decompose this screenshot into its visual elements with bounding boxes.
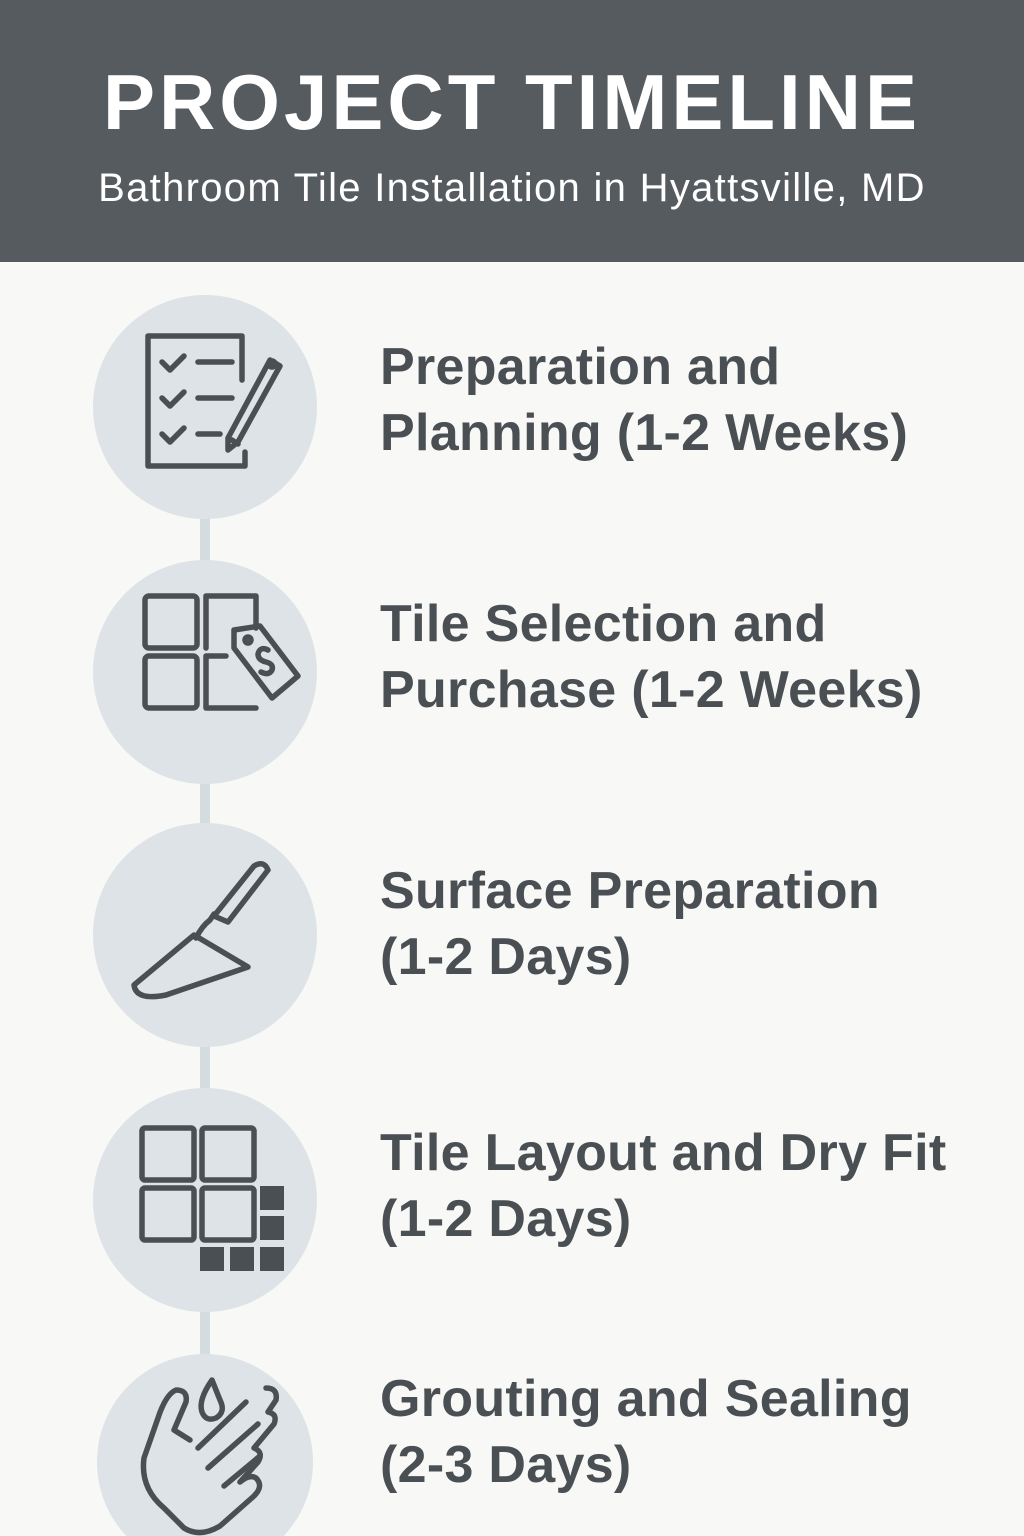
step 3 text: (1-2 Days) xyxy=(380,928,632,986)
icon: hand with drop xyxy=(97,1354,313,1536)
step 5 text xyxy=(380,1370,912,1494)
step 2 text: Purchase (1-2 Weeks) xyxy=(380,661,923,719)
step 5 text: (2-3 Days) xyxy=(380,1436,632,1494)
title: PROJECT TIMELINE xyxy=(103,58,921,146)
step 4 text: (1-2 Days) xyxy=(380,1190,632,1248)
step 2 text: Tile Selection and xyxy=(380,595,827,653)
icon: tiles with price tag xyxy=(93,560,317,784)
step 5 text: Grouting and Sealing xyxy=(380,1370,912,1428)
icon: checklist xyxy=(93,295,317,519)
step 3 text xyxy=(380,862,880,986)
step 1 text xyxy=(380,338,908,462)
icon: tile layout xyxy=(93,1088,317,1312)
subtitle: Bathroom Tile Installation in Hyattsville, MD xyxy=(98,166,926,210)
step 4 text: Tile Layout and Dry Fit xyxy=(380,1124,946,1182)
step 4 text xyxy=(380,1124,946,1248)
step 1 text: Preparation and xyxy=(380,338,780,396)
step 3 text: Surface Preparation xyxy=(380,862,880,920)
step 1 text: Planning (1-2 Weeks) xyxy=(380,404,908,462)
icon: trowel xyxy=(93,823,317,1047)
step 2 text xyxy=(380,595,923,719)
header xyxy=(0,0,1024,262)
